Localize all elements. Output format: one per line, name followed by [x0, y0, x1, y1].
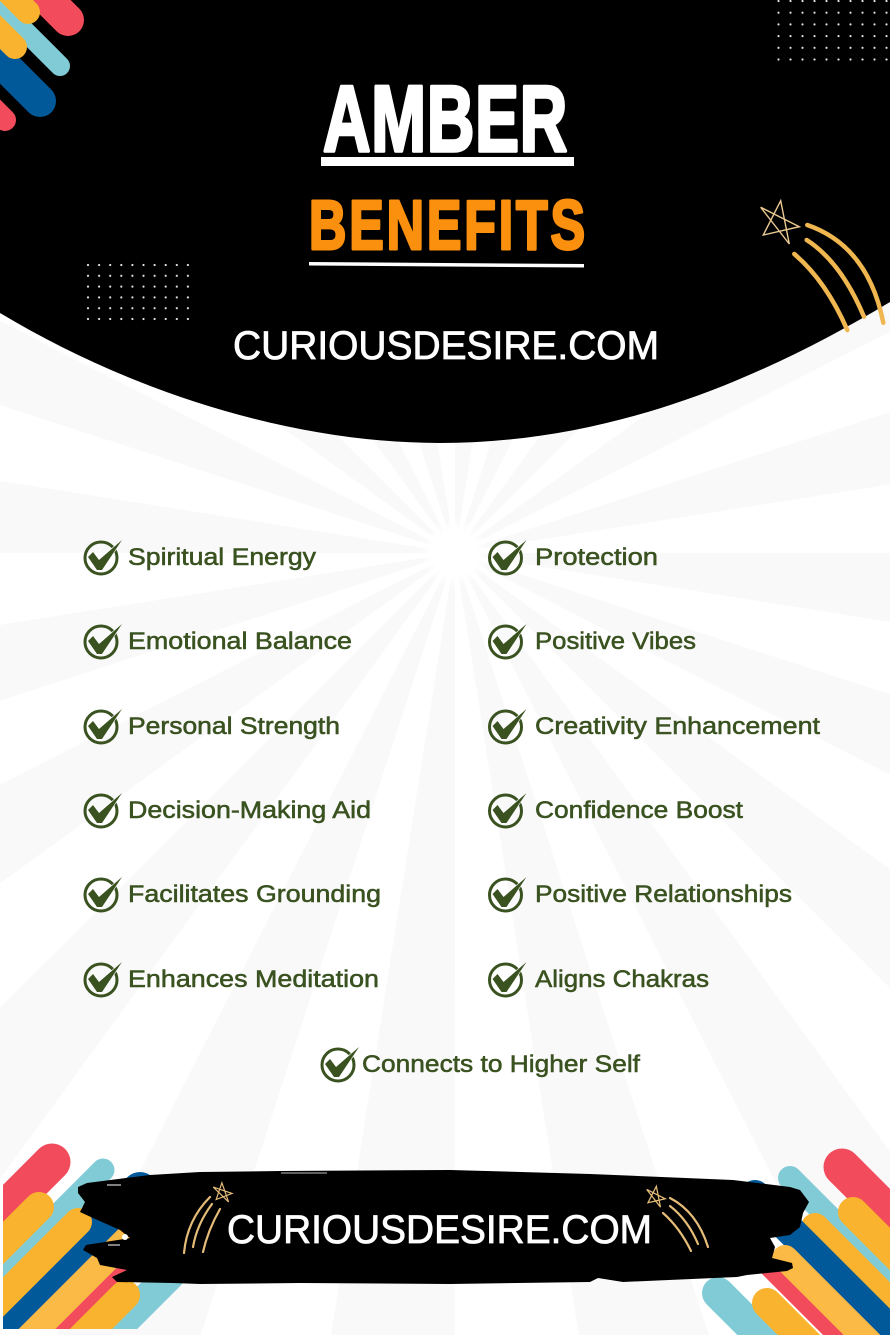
header black curved panel: [0, 0, 890, 443]
decoration: top-right dot grid: [776, 0, 890, 62]
decoration: bottom-left colored stripes: [0, 1162, 170, 1335]
item: Positive Relationships: Positive Relationships: [535, 881, 792, 908]
website name header: CURIOUSDESIRE.COM: [233, 324, 659, 368]
icon: shooting star banner right: [647, 1186, 708, 1251]
item: Personal Strength: Personal Strength: [128, 713, 340, 740]
item: Positive Relationships: [490, 877, 792, 911]
item: Confidence Boost: Confidence Boost: [535, 797, 743, 824]
item: Confidence Boost: [490, 793, 743, 827]
item: Connects to Higher Self: Connects to Higher Self: [362, 1051, 640, 1078]
website name banner: CURIOUSDESIRE.COM: [227, 1208, 652, 1252]
item: Personal Strength: [85, 709, 340, 743]
item: Enhances Meditation: Enhances Meditation: [128, 966, 379, 993]
icon: shooting star banner left: [184, 1182, 233, 1253]
decoration: left dot grid: [86, 263, 190, 321]
item: Emotional Balance: Emotional Balance: [128, 628, 352, 655]
item: Aligns Chakras: Aligns Chakras: [535, 966, 709, 993]
item: Creativity Enhancement: Creativity Enhancement: [535, 713, 820, 740]
item: Facilitates Grounding: [85, 877, 381, 911]
bottom black brush banner: [78, 1170, 809, 1284]
icon: shooting star top right: [761, 201, 883, 330]
item: Positive Vibes: [490, 624, 696, 658]
item: Connects to Higher Self: [322, 1047, 640, 1081]
decoration: bottom-right colored stripes: [718, 1167, 890, 1335]
item: Decision-Making Aid: [85, 793, 371, 827]
heading: Benefits: BENEFITS: [309, 186, 585, 265]
item: Protection: Protection: [535, 544, 658, 571]
item: Positive Vibes: Positive Vibes: [535, 628, 696, 655]
item: Protection: [490, 540, 658, 574]
item: Decision-Making Aid: Decision-Making Aid: [128, 797, 371, 824]
benefits list: [85, 540, 820, 1081]
item: Spiritual Energy: Spiritual Energy: [128, 544, 317, 571]
title: Amber: AMBER: [323, 68, 567, 172]
item: Enhances Meditation: [85, 962, 379, 996]
item: Aligns Chakras: [490, 962, 709, 996]
item: Spiritual Energy: [85, 540, 317, 574]
item: Facilitates Grounding: Facilitates Grounding: [128, 881, 381, 908]
decoration: top-left colored stripes: [0, 0, 68, 120]
item: Emotional Balance: [85, 624, 352, 658]
item: Creativity Enhancement: [490, 709, 820, 743]
